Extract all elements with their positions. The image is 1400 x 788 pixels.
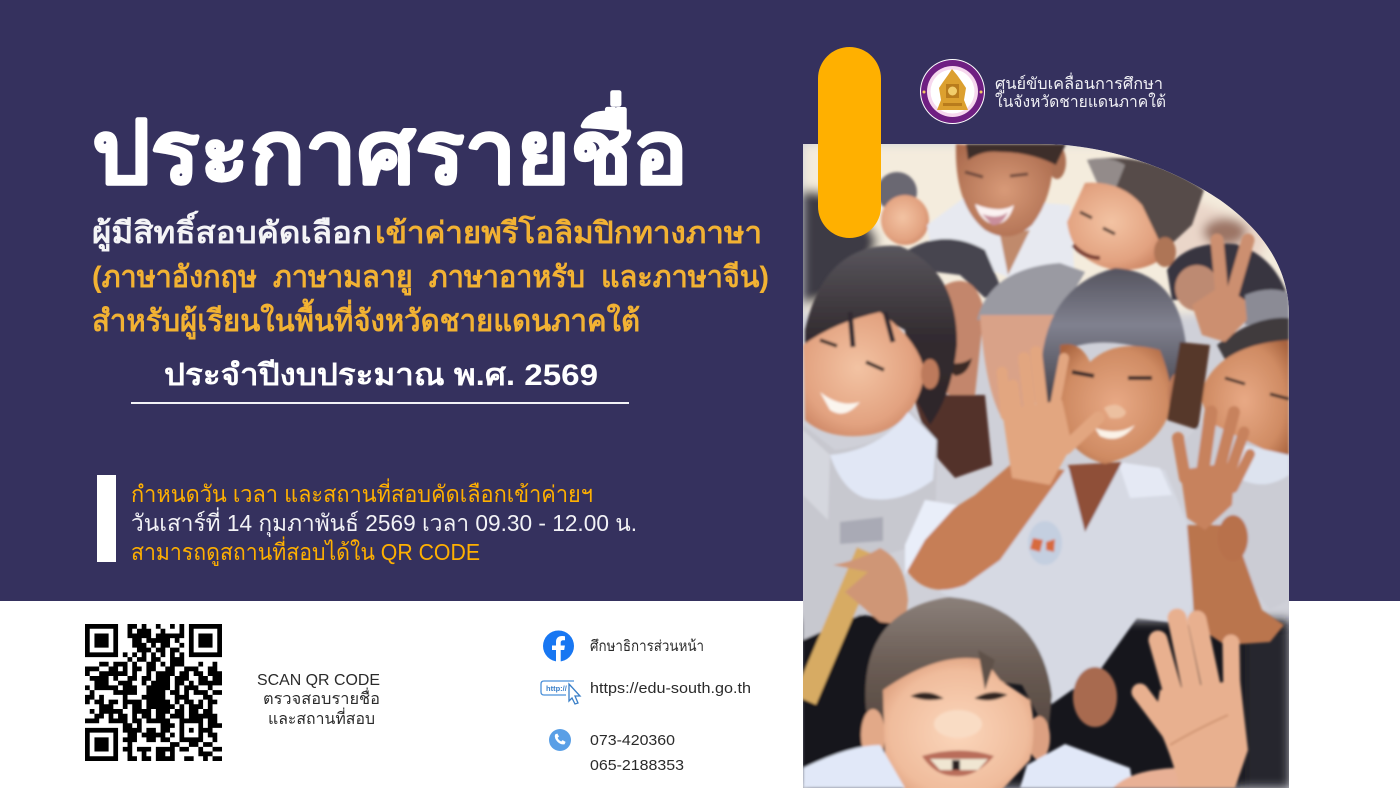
waving hand on main child bbox=[1002, 352, 1098, 448]
icon: facebook bbox=[543, 630, 574, 662]
v-sign hand bbox=[1217, 240, 1248, 295]
child behind centre bbox=[977, 263, 1085, 320]
main centre child: hair, face bbox=[1041, 268, 1186, 410]
left main child bbox=[805, 246, 957, 425]
details line 3: สามารถดูสถานที่สอบได้ใน QR CODE bbox=[131, 536, 480, 566]
photo: group of smiling schoolchildren bbox=[803, 144, 1290, 788]
lower dark background behind the stick hand bbox=[803, 615, 905, 788]
details line 2: วันเสาร์ที่ 14 กุมภาพันธ์ 2569 เวลา 09.30 - 12.00 น. bbox=[131, 507, 637, 537]
forearm and waving hand at bottom bbox=[1112, 766, 1182, 788]
top centre child bbox=[1048, 145, 1066, 179]
navy header background bbox=[0, 0, 1400, 601]
left child behind pill bbox=[877, 172, 917, 212]
title: ประกาศรายชื่อ bbox=[92, 91, 688, 202]
stick hand bbox=[833, 548, 908, 625]
raised arm and sleeve bbox=[905, 465, 1065, 590]
organisation name: ศูนย์ขับเคลื่อนการศึกษา bbox=[995, 72, 1163, 94]
fiscal year line: ประจำปีงบประมาณ พ.ศ. 2569 bbox=[164, 359, 598, 392]
subtitle line 1 yellow part: เข้าค่ายพรีโอลิมปิกทางภาษา bbox=[375, 214, 762, 250]
top centre child shirt bbox=[927, 197, 1075, 280]
phone numbers: 073-420360 bbox=[590, 732, 675, 749]
subtitle line 1 white part: ผู้มีสิทธิ์สอบคัดเลือก bbox=[92, 210, 372, 252]
right arms bbox=[1187, 525, 1284, 645]
far right shirt bbox=[1184, 422, 1263, 598]
left child shirt bbox=[803, 410, 937, 645]
phone numbers bbox=[590, 732, 684, 774]
QR caption: ตรวจสอบรายชื่อ bbox=[263, 687, 380, 708]
facebook label: ศึกษาธิการส่วนหน้า bbox=[590, 638, 704, 655]
QR caption bbox=[257, 672, 380, 728]
website label: https://edu-south.go.th bbox=[590, 680, 751, 697]
underline bbox=[131, 402, 629, 404]
right raised hand bbox=[1178, 412, 1250, 488]
subtitle block bbox=[92, 210, 769, 340]
white shirts at photo bottom bbox=[803, 744, 1133, 788]
subtitle line 2: (ภาษาอังกฤษ ภาษามลายู ภาษาอาหรับ และภาษาจีน) bbox=[92, 261, 769, 296]
QR caption: SCAN QR CODE bbox=[257, 672, 380, 689]
exam date details bbox=[131, 478, 637, 566]
icon: phone bbox=[549, 729, 571, 751]
organisation name bbox=[995, 72, 1166, 111]
subtitle line 3: สำหรับผู้เรียนในพื้นที่จังหวัดชายแดนภาคใต้ bbox=[92, 298, 640, 340]
icon: web link cursor bbox=[541, 681, 580, 704]
organisation name: ในจังหวัดชายแดนภาคใต้ bbox=[995, 92, 1166, 111]
icon: web link cursor: http:// bbox=[546, 684, 568, 693]
far right child bbox=[1217, 318, 1289, 365]
QR code bbox=[85, 626, 222, 759]
QR caption: และสถานที่สอบ bbox=[268, 707, 375, 728]
upper right child bbox=[1103, 156, 1206, 244]
stick bbox=[805, 552, 868, 700]
details line 1: กำหนดวัน เวลา และสถานที่สอบคัดเลือกเข้าค่ายฯ bbox=[131, 478, 593, 507]
child behind left bbox=[908, 239, 1002, 298]
bottom child bbox=[865, 597, 1052, 735]
white vertical bar bbox=[97, 475, 116, 562]
logo: education emblem bbox=[920, 59, 985, 124]
main shirt bbox=[940, 463, 1192, 704]
phone numbers: 065-2188353 bbox=[590, 757, 684, 774]
orange rounded pill bbox=[818, 47, 881, 238]
hand under the shirt bbox=[1073, 667, 1117, 727]
far right child with v-sign bbox=[1167, 244, 1289, 300]
